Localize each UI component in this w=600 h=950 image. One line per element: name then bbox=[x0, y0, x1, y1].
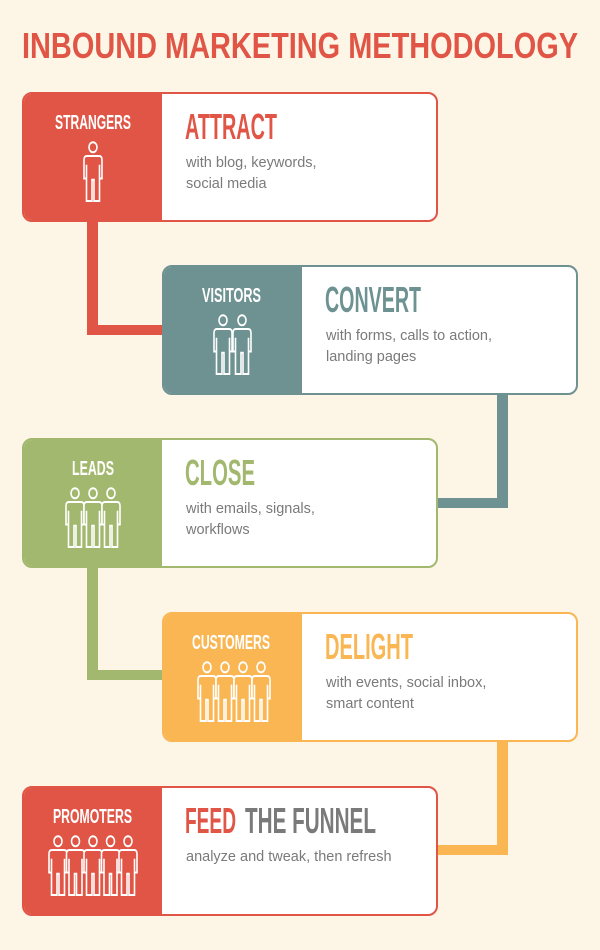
heading and label: DELIGHT bbox=[325, 626, 413, 667]
heading and label: FEED bbox=[185, 800, 236, 841]
heading and label: LEADS bbox=[72, 458, 114, 480]
heading and label: PROMOTERS bbox=[53, 806, 132, 828]
heading and label: ATTRACT bbox=[185, 106, 277, 147]
icon: five persons bbox=[48, 835, 138, 896]
heading and label: CLOSE bbox=[185, 452, 255, 493]
panel: close bbox=[22, 438, 438, 568]
panel: convert: landing pages bbox=[326, 349, 416, 365]
icon: three persons bbox=[65, 487, 121, 548]
heading and label bbox=[192, 626, 413, 667]
panel: delight: with events, social inbox, bbox=[326, 675, 486, 691]
panel: close: workflows bbox=[186, 522, 250, 538]
panel: convert bbox=[162, 265, 578, 395]
heading and label: VISITORS bbox=[202, 285, 261, 307]
connector: red bbox=[87, 222, 98, 335]
panel: delight: smart content bbox=[326, 696, 414, 712]
heading and label: CONVERT bbox=[325, 279, 421, 320]
heading and label: STRANGERS bbox=[55, 112, 131, 134]
panel: attract bbox=[22, 92, 438, 222]
heading and label bbox=[72, 452, 255, 493]
panel: feed the funnel: analyze and tweak, then refresh bbox=[186, 849, 392, 865]
heading and label: CUSTOMERS bbox=[192, 632, 270, 654]
icon: two persons bbox=[213, 314, 252, 375]
connector: green bbox=[87, 568, 98, 680]
panel: convert: with forms, calls to action, bbox=[326, 328, 492, 344]
panel: attract: with blog, keywords, bbox=[186, 155, 317, 171]
heading and label bbox=[202, 279, 421, 320]
heading and label bbox=[53, 800, 376, 841]
icon: one person bbox=[83, 141, 103, 202]
connector: teal bbox=[497, 395, 508, 508]
connector: yellow bbox=[497, 742, 508, 855]
icon: four persons bbox=[197, 661, 271, 722]
panel: close: with emails, signals, bbox=[186, 501, 315, 517]
panel: feed the funnel bbox=[22, 786, 438, 916]
panel: delight bbox=[162, 612, 578, 742]
heading and label bbox=[55, 106, 277, 147]
panel: attract: social media bbox=[186, 176, 267, 192]
